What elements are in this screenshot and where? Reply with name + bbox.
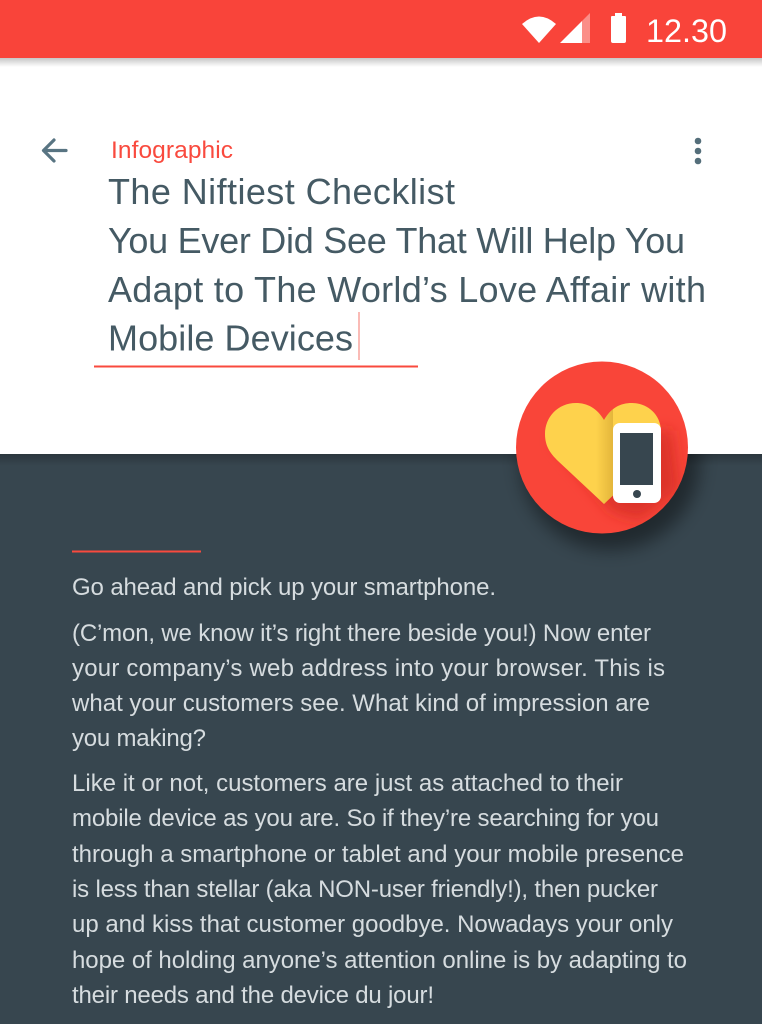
soft cast shadow inside badge <box>585 428 682 522</box>
text block: second paragraph: you making? <box>72 725 206 752</box>
icon: heart <box>545 403 661 504</box>
title: Mobile Devices <box>108 318 353 358</box>
icon: smartphone <box>613 423 661 503</box>
badge: heart and phone <box>516 362 688 534</box>
panel: intro dark background <box>0 454 762 1024</box>
text block: third paragraph: Like it or not, customers are just as attached to their <box>72 770 623 797</box>
title: Adapt to The World’s Love Affair with <box>108 269 706 310</box>
clock time: 12.30 <box>646 13 727 49</box>
text block: third paragraph: through a smartphone or tablet and your mobile presence <box>72 841 684 868</box>
text block: third paragraph <box>72 770 687 1009</box>
text block: second paragraph: what your customers see. What kind of impression are <box>71 690 650 717</box>
text block: third paragraph: up and kiss that customer goodbye. Nowadays your only <box>72 911 673 938</box>
title: You Ever Did See That Will Help You <box>108 220 685 261</box>
icon: wifi <box>522 16 556 43</box>
icon: overflow menu dots <box>695 138 701 164</box>
text block: second paragraph <box>71 620 665 752</box>
title <box>108 171 706 358</box>
text caret <box>358 312 360 360</box>
status bar <box>0 0 762 67</box>
category label: Infographic <box>111 137 233 164</box>
icon: battery <box>611 13 626 43</box>
text block: opening line: Go ahead and pick up your smartphone. <box>72 574 496 601</box>
icon: back arrow <box>44 140 66 161</box>
panel: article header background <box>0 58 762 454</box>
text block: third paragraph: mobile device as you are. So if they’re searching for you <box>72 805 659 832</box>
text block: third paragraph: hope of holding anyone’s attention online is by adapting to <box>72 947 687 974</box>
title: The Niftiest Checklist <box>108 171 455 212</box>
text block: second paragraph: (C’mon, we know it’s right there beside you!) Now enter <box>72 620 651 647</box>
title underline <box>94 366 418 368</box>
text block: third paragraph: is less than stellar (aka NON-user friendly!), then pucker <box>72 876 658 903</box>
text block: second paragraph: your company’s web address into your browser. This is <box>72 655 665 682</box>
intro accent rule <box>72 550 201 552</box>
text block: third paragraph: their needs and the device du jour! <box>72 982 434 1009</box>
icon: signal strength <box>560 13 590 43</box>
